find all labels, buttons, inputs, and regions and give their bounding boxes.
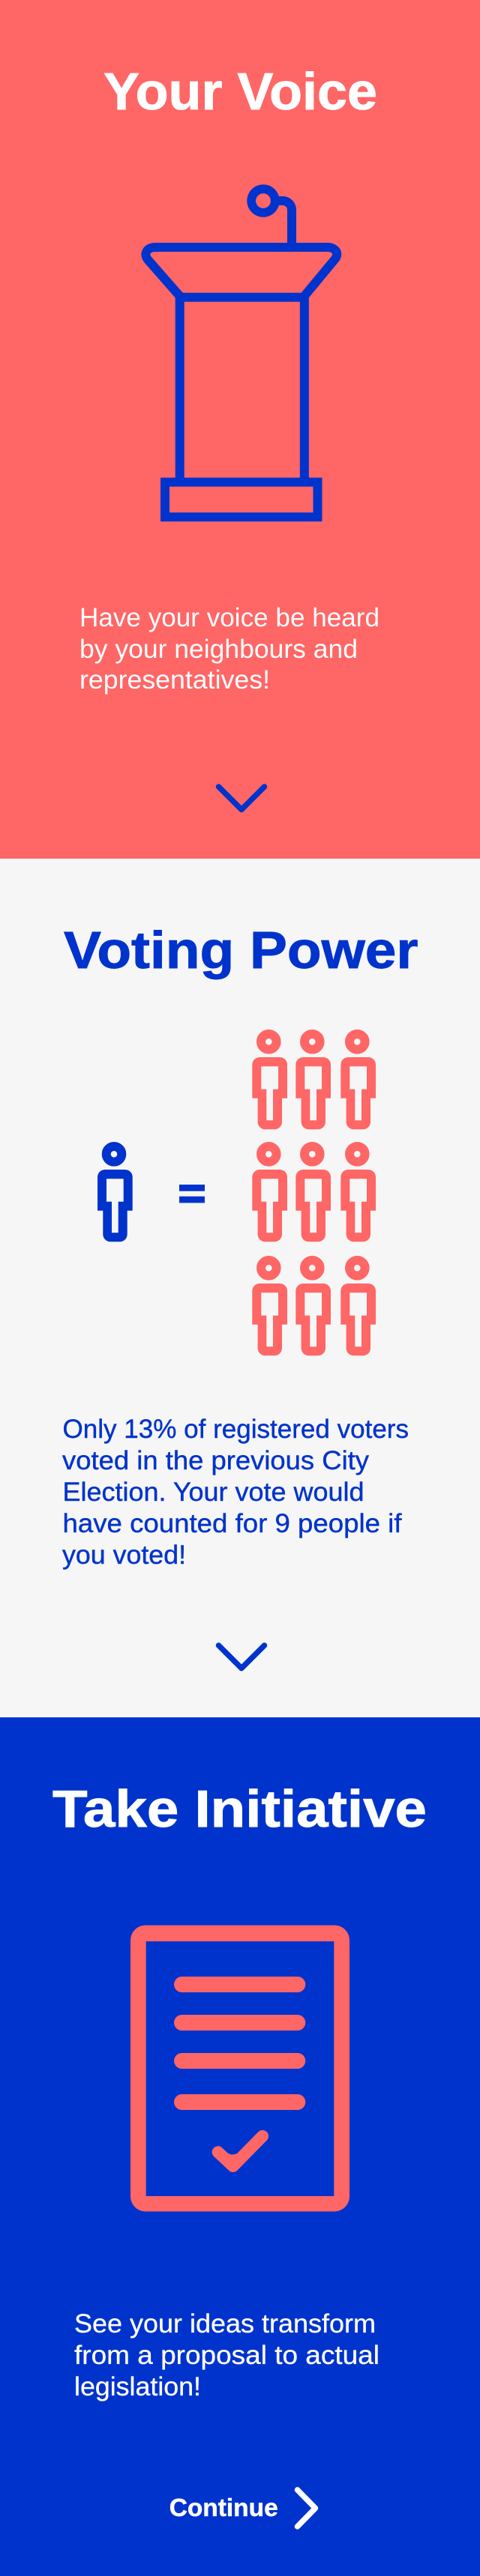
arrow: down chevron (219, 1645, 264, 1668)
panel: take initiative (0, 1717, 480, 2576)
heading: Take Initiative: Take Initiative (52, 1780, 427, 1838)
text block: voting power description (62, 1415, 409, 1570)
text block: take initiative description: legislation! (74, 2372, 201, 2401)
icon: document with checkmark (130, 1926, 350, 2212)
icon: equals sign (179, 1185, 205, 1203)
icon group: nine red people (252, 1034, 376, 1355)
icon: podium with microphone (146, 189, 337, 517)
panel: voting power (0, 859, 480, 1717)
text block: your voice description (80, 603, 380, 695)
continue label: Continue (170, 2494, 278, 2522)
text block: voting power description: have counted for 9 people if (63, 1509, 402, 1538)
text block: take initiative description: from a proposal to actual (74, 2341, 380, 2370)
arrow: right chevron (297, 2490, 315, 2527)
text block: voting power description: you voted! (62, 1541, 186, 1570)
text block: voting power description: Election. Your vote would (63, 1478, 364, 1507)
text block: take initiative description: See your ideas transform (74, 2309, 376, 2338)
text block: your voice description: by your neighbours and (80, 635, 358, 664)
text block: voting power description: Only 13% of registered voters (63, 1415, 409, 1444)
arrow: down chevron (219, 787, 264, 809)
text block: your voice description: representatives! (80, 665, 270, 695)
icon: single blue person (98, 1146, 133, 1242)
text block: take initiative description (74, 2309, 380, 2401)
text block: your voice description: Have your voice be heard (80, 603, 380, 632)
heading: Your Voice: Your Voice (104, 62, 377, 121)
panel: your voice (0, 0, 480, 859)
text block: voting power description: voted in the previous City (62, 1446, 370, 1475)
heading: Voting Power: Voting Power (64, 921, 418, 979)
